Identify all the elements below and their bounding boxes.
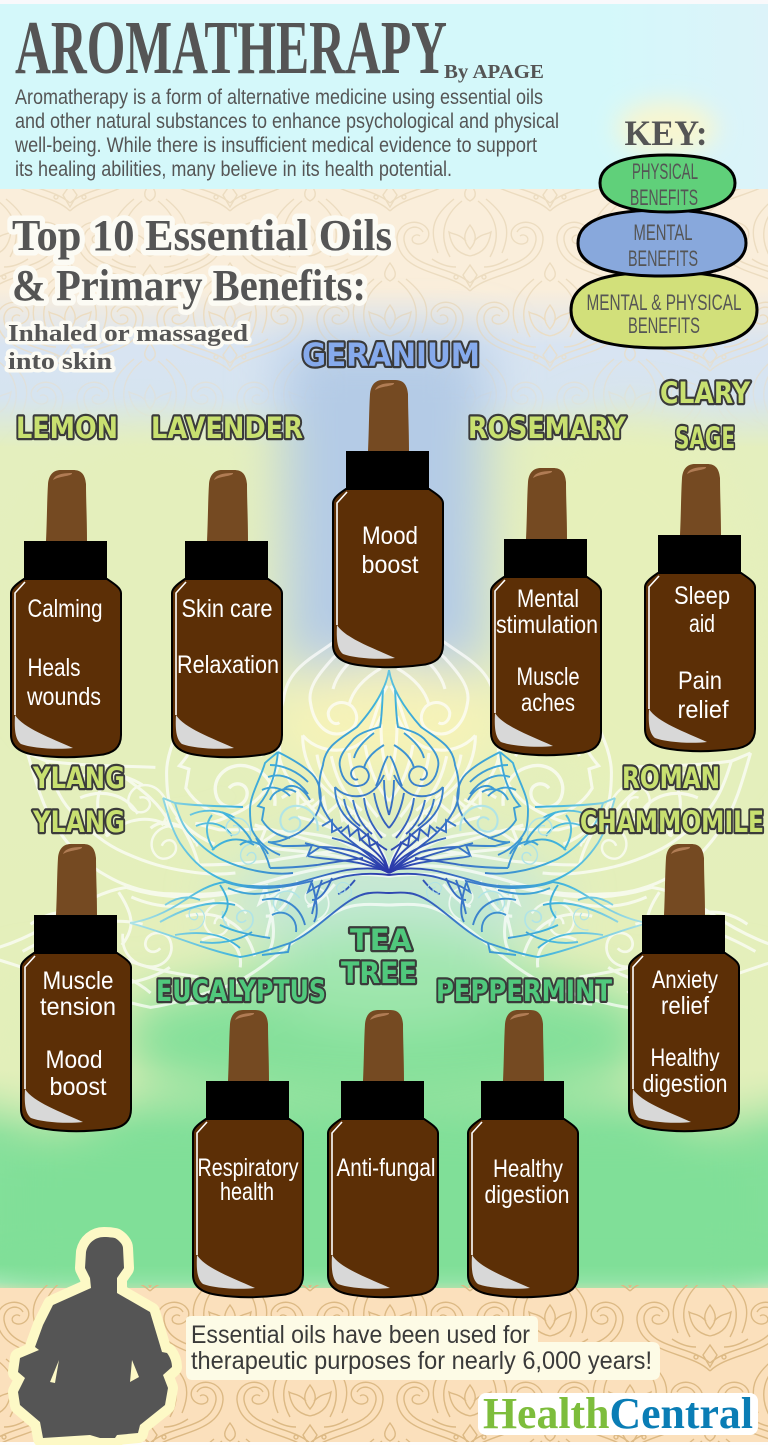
- bottle: clary sage: Pain: [678, 667, 722, 695]
- byline: By APAGE: [444, 61, 544, 83]
- oil name labels: EUCALYPTUS: [156, 974, 326, 1008]
- bottle: eucalyptus: Respiratory: [198, 1154, 299, 1182]
- callout: history fact: [186, 1316, 660, 1380]
- key title: KEY:: [624, 113, 708, 153]
- key: [571, 102, 757, 348]
- bottle: rosemary: [491, 468, 601, 755]
- bottle: lemon: wounds: [26, 683, 101, 711]
- bottle: geranium: [333, 380, 443, 667]
- key: physical benefits: PHYSICAL: [632, 159, 698, 184]
- bottle: ylang ylang: Muscle: [42, 967, 114, 995]
- heading: & Primary Benefits:: [12, 261, 366, 310]
- bottle: lemon: Calming: [28, 595, 102, 623]
- key: physical benefits: [600, 155, 735, 212]
- key: mental benefits: MENTAL: [634, 220, 692, 245]
- bottle: lemon: [11, 470, 121, 757]
- intro text: Aromatherapy is a form of alternative medicine using essential oils: [15, 86, 543, 109]
- oil name labels: GERANIUM: [302, 336, 480, 374]
- bottle: peppermint: Healthy: [493, 1155, 563, 1183]
- key: mental and physical benefits: BENEFITS: [628, 313, 700, 338]
- subheading: into skin: [8, 349, 112, 375]
- bottle: roman chamomile: relief: [661, 992, 709, 1020]
- heading: Top 10 Essential Oils: [12, 211, 392, 260]
- bottle: roman chamomile: Healthy: [650, 1044, 720, 1072]
- oil name labels: LAVENDER: [151, 411, 303, 445]
- bottle: roman chamomile: Anxiety: [652, 966, 718, 994]
- bottle: ylang ylang: boost: [50, 1073, 107, 1101]
- bottle: tea tree: [328, 1010, 438, 1297]
- oil name labels: YLANG: [32, 761, 125, 795]
- key: mental benefits: [578, 210, 746, 276]
- heading: [12, 211, 392, 310]
- bottle: ylang ylang: [21, 844, 131, 1131]
- callout: history fact: therapeutic purposes for nearly 6,000 years!: [191, 1347, 652, 1375]
- bottle: clary sage: aid: [689, 610, 715, 638]
- intro text: its healing abilities, many believe in its health potential.: [15, 158, 452, 181]
- bottle: ylang ylang: Mood: [46, 1046, 102, 1074]
- callout: history fact: Essential oils have been used for: [191, 1321, 530, 1349]
- subheading: [8, 321, 249, 375]
- bottle: roman chamomile: digestion: [642, 1070, 728, 1098]
- oil name labels: TEA: [350, 923, 413, 957]
- bottle: geranium: Mood: [362, 522, 418, 550]
- bottle: ylang ylang: tension: [40, 993, 116, 1021]
- header band: [0, 0, 768, 189]
- icon: meditating silhouette: [18, 1237, 172, 1438]
- intro text: well-being. While there is insufficient medical evidence to support: [14, 134, 537, 157]
- subheading: Inhaled or massaged: [8, 321, 249, 347]
- bottle: clary sage: Sleep: [674, 582, 730, 610]
- title: AROMATHERAPY: [15, 6, 447, 90]
- oil name labels: ROSEMARY: [468, 411, 627, 445]
- oil name labels: ROMAN: [622, 761, 720, 795]
- bottle: tea tree: Anti-fungal: [336, 1154, 436, 1182]
- bottle: lavender: Relaxation: [177, 651, 279, 679]
- oil name labels: YLANG: [32, 805, 125, 839]
- bottle: rosemary: Mental: [517, 585, 579, 613]
- oil name labels: PEPPERMINT: [436, 974, 612, 1008]
- logo: HealthCentral: HealthCentral: [483, 1389, 753, 1438]
- bottle: roman chamomile: [629, 844, 739, 1131]
- bottle: lavender: Skin care: [182, 595, 272, 623]
- bottle: clary sage: [645, 464, 755, 751]
- oil name labels: CLARY: [660, 376, 751, 410]
- bottle: lemon: Heals: [28, 654, 80, 682]
- bottle: rosemary: aches: [521, 689, 575, 717]
- oil name labels: LEMON: [16, 411, 118, 445]
- oil name labels: SAGE: [675, 421, 735, 455]
- lotus mandala: [130, 670, 648, 957]
- bottle: eucalyptus: [193, 1010, 303, 1297]
- bottle: clary sage: relief: [678, 696, 729, 724]
- bottle: lavender: [172, 470, 282, 757]
- key: physical benefits: BENEFITS: [630, 185, 698, 210]
- bottle: geranium: boost: [362, 551, 419, 579]
- bottle: peppermint: digestion: [484, 1181, 570, 1209]
- oil name labels: [16, 336, 764, 1008]
- bottle: rosemary: Muscle: [516, 663, 580, 691]
- bottle: peppermint: [468, 1010, 578, 1297]
- mandala backdrop: [0, 548, 768, 1007]
- intro text: and other natural substances to enhance psychological and physical: [15, 110, 559, 133]
- key: mental benefits: BENEFITS: [628, 246, 698, 271]
- oil name labels: TREE: [341, 956, 417, 990]
- bottle: eucalyptus: health: [220, 1178, 274, 1206]
- key: mental and physical benefits: [571, 272, 757, 348]
- bottle: rosemary: stimulation: [496, 611, 598, 639]
- intro text: [14, 86, 559, 181]
